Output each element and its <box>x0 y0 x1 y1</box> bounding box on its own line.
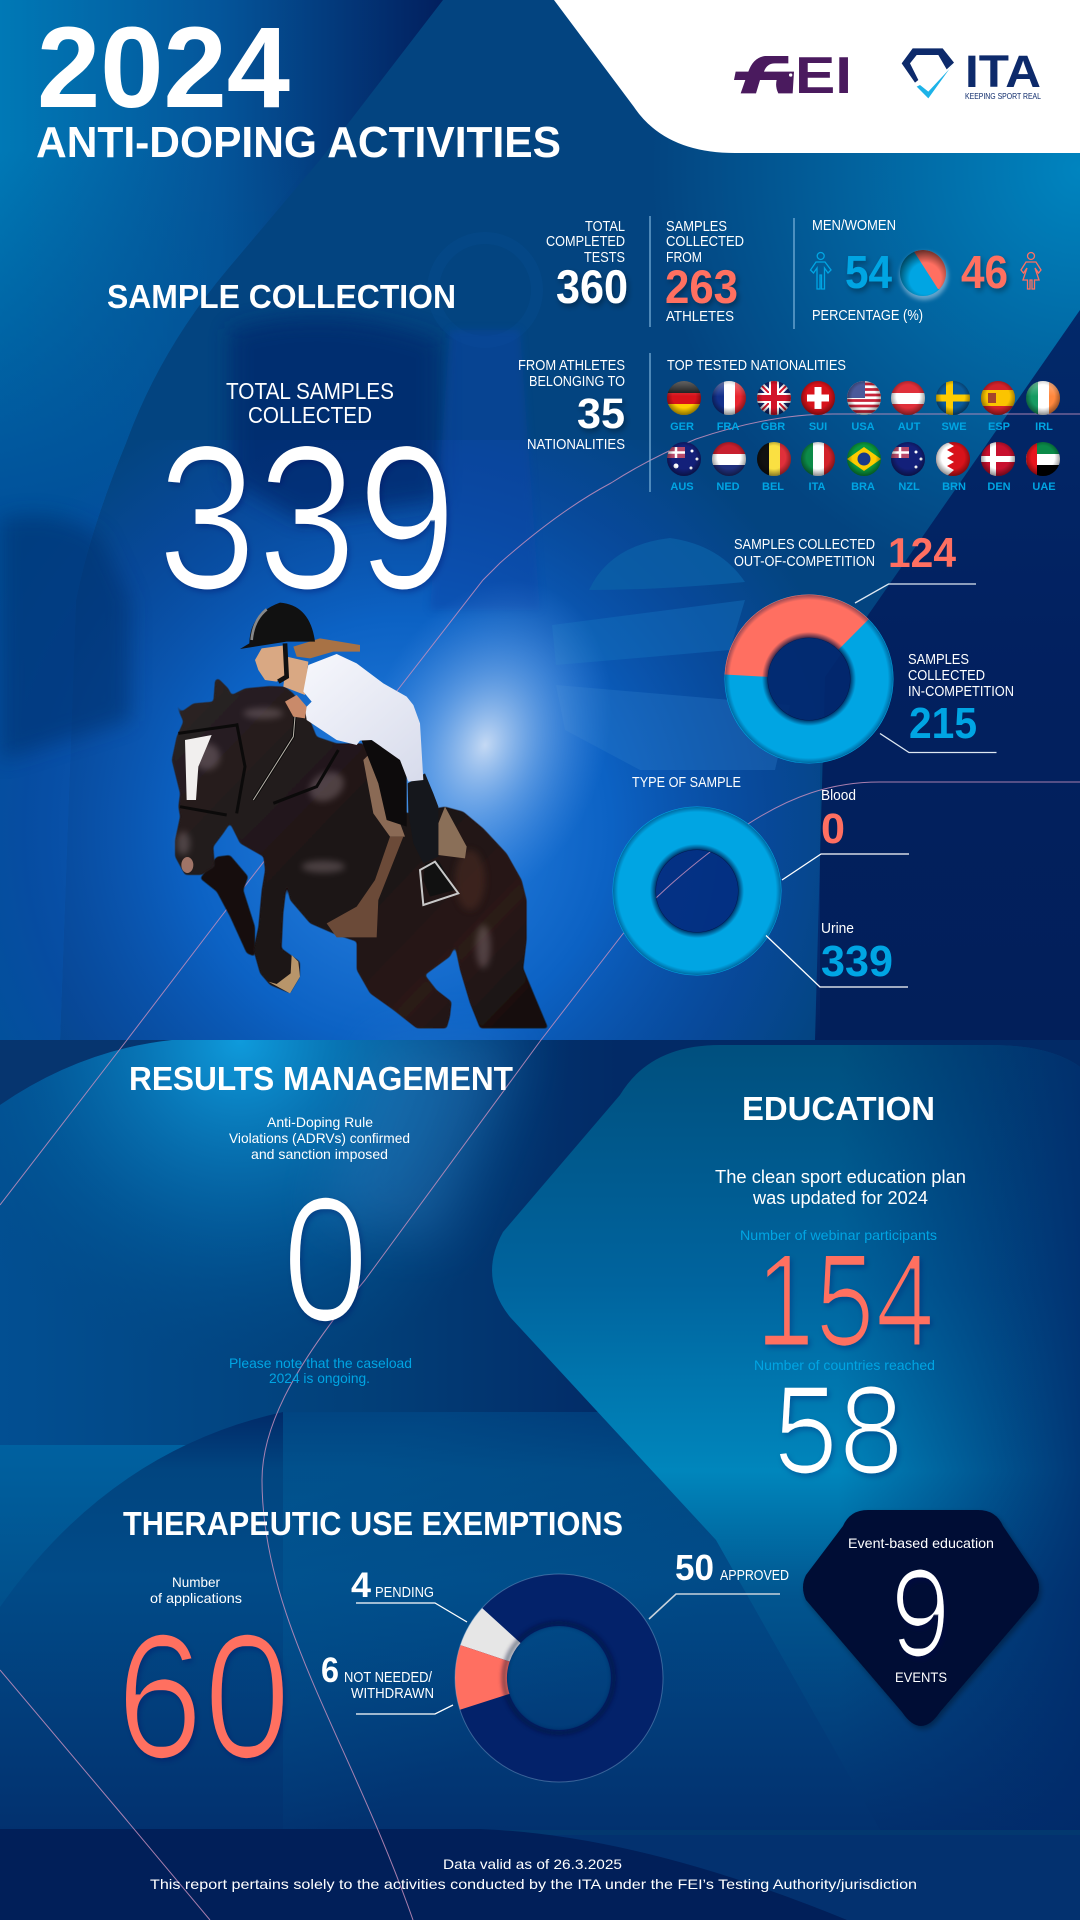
stat: total completed tests <box>546 218 628 313</box>
callout: in-competition: 215 <box>909 699 977 748</box>
flag: AUS: AUS <box>670 481 694 493</box>
title <box>36 4 561 167</box>
flag: GBR: GBR <box>761 421 785 433</box>
callout: out-of-competition: 124 <box>888 529 957 576</box>
heading: top tested nationalities: TOP TESTED NATIONALITIES <box>667 357 846 374</box>
flag: GBR <box>757 381 791 433</box>
flag: BRN <box>936 442 970 493</box>
flag: BRA <box>847 442 881 493</box>
blaze <box>185 735 212 800</box>
callout: in-competition <box>880 651 1014 752</box>
heading: education: EDUCATION <box>742 1090 935 1127</box>
stat: total samples collected: 339 <box>157 404 457 632</box>
panel: event-based education: EVENTS <box>895 1669 947 1685</box>
callout: approved: APPROVED <box>720 1567 789 1584</box>
donut: type of sample <box>613 807 781 975</box>
logo: FEI <box>734 47 852 105</box>
text: ADRV description <box>229 1114 410 1162</box>
stat: athletes: ATHLETES <box>666 308 734 325</box>
stat: men and women: 46 <box>961 246 1008 298</box>
text: education plan: The clean sport education plan <box>715 1167 966 1187</box>
stat: total completed tests: TESTS <box>584 249 625 266</box>
callout: out-of-competition: SAMPLES COLLECTED <box>734 536 875 553</box>
logo: ITA: ITA <box>965 46 1041 97</box>
stat: applications: 60 <box>116 1599 291 1795</box>
flag: ITA <box>801 442 835 493</box>
flag: BRN: BRN <box>942 481 966 493</box>
callout: pending: PENDING <box>375 1584 434 1601</box>
logo: FEI: EI <box>795 47 852 105</box>
flag: IRL: IRL <box>1035 421 1053 433</box>
lower background panels <box>0 1040 1080 1835</box>
girth and saddle <box>327 737 467 937</box>
text: ADRV description: and sanction imposed <box>251 1146 388 1162</box>
callout: not needed: WITHDRAWN <box>351 1685 434 1702</box>
hoof <box>268 955 300 993</box>
flag: ITA: ITA <box>809 481 826 493</box>
flag: AUS <box>667 442 701 493</box>
flag: GER <box>667 381 701 433</box>
flag: NED <box>712 442 746 493</box>
callout: in-competition: SAMPLES <box>908 651 969 668</box>
flag: DEN: DEN <box>987 481 1011 493</box>
panel: event-based education: Event-based education <box>848 1535 994 1551</box>
text: education plan <box>715 1167 966 1208</box>
callout: urine <box>766 920 908 987</box>
stat: athletes: FROM <box>666 249 702 266</box>
callout: pending: 4 <box>351 1566 372 1605</box>
stat: nationalities: NATIONALITIES <box>527 436 625 453</box>
stat: total completed tests: COMPLETED <box>546 233 625 250</box>
flags <box>667 381 1060 493</box>
heading: sample collection: SAMPLE COLLECTION <box>107 278 456 315</box>
heading: results management: RESULTS MANAGEMENT <box>129 1060 513 1097</box>
heading: type of sample: TYPE OF SAMPLE <box>632 774 741 791</box>
stat: men and women: 54 <box>845 246 892 298</box>
stat: athletes: COLLECTED <box>666 233 744 250</box>
flag: NED: NED <box>716 481 740 493</box>
callout: urine: 339 <box>821 937 893 986</box>
footer text: This report pertains solely to the activities conducted by the ITA under the FEI’s Testing Authority/jurisdiction <box>150 1876 917 1892</box>
donut holes <box>767 637 851 721</box>
callout: blood: 0 <box>821 805 845 853</box>
stat: athletes: 263 <box>665 260 738 313</box>
stat: nationalities: BELONGING TO <box>529 373 625 390</box>
flag: GER: GER <box>670 421 694 433</box>
flag: ESP: ESP <box>988 421 1010 433</box>
stat: men and women <box>810 217 1041 324</box>
text: ADRV description: Anti-Doping Rule <box>267 1114 373 1130</box>
decorative lines <box>0 414 1080 1920</box>
stat: total completed tests: TOTAL <box>585 218 625 235</box>
flag: SUI: SUI <box>809 421 827 433</box>
flag: FRA <box>712 381 746 433</box>
flag: SWE: SWE <box>941 421 967 433</box>
callout: out-of-competition: OUT-OF-COMPETITION <box>734 553 875 570</box>
footer text <box>150 1856 917 1892</box>
stat: nationalities: 35 <box>577 390 625 438</box>
stat: men and women: MEN/WOMEN <box>812 217 896 234</box>
flag: UAE: UAE <box>1032 481 1056 493</box>
logo: ITA: KEEPING SPORT REAL <box>965 91 1041 101</box>
callout: in-competition: COLLECTED <box>908 667 985 684</box>
horse body <box>165 678 548 1028</box>
note: caseload: 2024 is ongoing. <box>269 1370 370 1386</box>
callout: out-of-competition <box>734 529 976 603</box>
icon: percentage ball <box>897 249 951 303</box>
flag: SUI <box>801 381 835 433</box>
callout: in-competition: IN-COMPETITION <box>908 683 1014 700</box>
stat: countries reached: 58 <box>773 1362 904 1500</box>
footer text: Data valid as of 26.3.2025 <box>443 1856 622 1872</box>
footer band <box>0 1829 847 1920</box>
panel: education background <box>492 1045 1080 1830</box>
flag: BRA: BRA <box>851 481 875 493</box>
donut: TUE outcomes <box>455 1574 663 1782</box>
stat: nationalities <box>518 357 625 453</box>
callout: blood <box>782 787 909 880</box>
stat: countries reached: Number of countries reached <box>754 1357 935 1373</box>
background <box>0 0 1080 1050</box>
first front leg <box>200 855 255 957</box>
callout: not needed: 6 <box>321 1651 339 1690</box>
logo: ITA <box>902 46 1041 101</box>
flag: USA <box>847 381 881 433</box>
flag: BEL <box>757 442 791 493</box>
panel: event-based education: 9 <box>890 1545 951 1683</box>
flag: NZL: NZL <box>898 481 920 493</box>
stat: men and women: PERCENTAGE (%) <box>812 307 923 324</box>
callout: not needed <box>321 1651 453 1714</box>
stat: webinar participants: 154 <box>755 1227 935 1373</box>
flag: IRL <box>1026 381 1060 433</box>
flag: ESP <box>981 381 1015 433</box>
flag: AUT <box>891 381 925 433</box>
callout: blood: Blood <box>821 787 856 804</box>
stat: athletes: SAMPLES <box>666 218 727 235</box>
icon: woman <box>1021 252 1041 289</box>
heading: therapeutic use exemptions: THERAPEUTIC USE EXEMPTIONS <box>123 1505 623 1542</box>
flag: BEL: BEL <box>762 481 784 493</box>
stat: nationalities: FROM ATHLETES <box>518 357 625 374</box>
donut: competition split <box>725 595 893 763</box>
flag: FRA: FRA <box>717 421 739 433</box>
flag: USA: USA <box>851 421 875 433</box>
panel: event-based education <box>803 1510 1039 1726</box>
note: caseload <box>229 1355 412 1386</box>
rider <box>240 603 458 905</box>
stat: applications: of applications <box>150 1590 242 1606</box>
bridle <box>178 717 338 815</box>
title: ANTI-DOPING ACTIVITIES <box>36 118 561 167</box>
note: caseload: Please note that the caseload <box>229 1355 412 1371</box>
flag: UAE <box>1026 442 1060 493</box>
illustration: horse and rider <box>165 603 548 1028</box>
flag: NZL <box>891 442 925 493</box>
flag: AUT: AUT <box>898 421 921 433</box>
stat: applications: Number <box>172 1574 220 1590</box>
text: ADRV description: Violations (ADRVs) confirmed <box>229 1130 410 1146</box>
callout: not needed: NOT NEEDED/ <box>344 1669 433 1686</box>
stat: athletes <box>665 218 744 325</box>
callout: urine: Urine <box>821 920 854 937</box>
callout: pending <box>351 1566 467 1622</box>
callout: approved <box>649 1547 789 1619</box>
white logo corner <box>554 0 1080 153</box>
title: 2024 <box>37 4 290 132</box>
icon: man <box>810 252 831 289</box>
highlights <box>177 708 491 968</box>
stat: total completed tests: 360 <box>556 260 628 313</box>
stat: total samples collected: COLLECTED <box>248 402 372 428</box>
flag: DEN <box>981 442 1015 493</box>
stat: webinar participants: Number of webinar participants <box>740 1227 937 1243</box>
stat: zero ADRVs: 0 <box>282 1162 369 1358</box>
stat: total samples collected: TOTAL SAMPLES <box>226 378 394 404</box>
flag: SWE <box>936 381 970 433</box>
callout: approved: 50 <box>675 1547 714 1588</box>
text: education plan: was updated for 2024 <box>752 1188 928 1208</box>
